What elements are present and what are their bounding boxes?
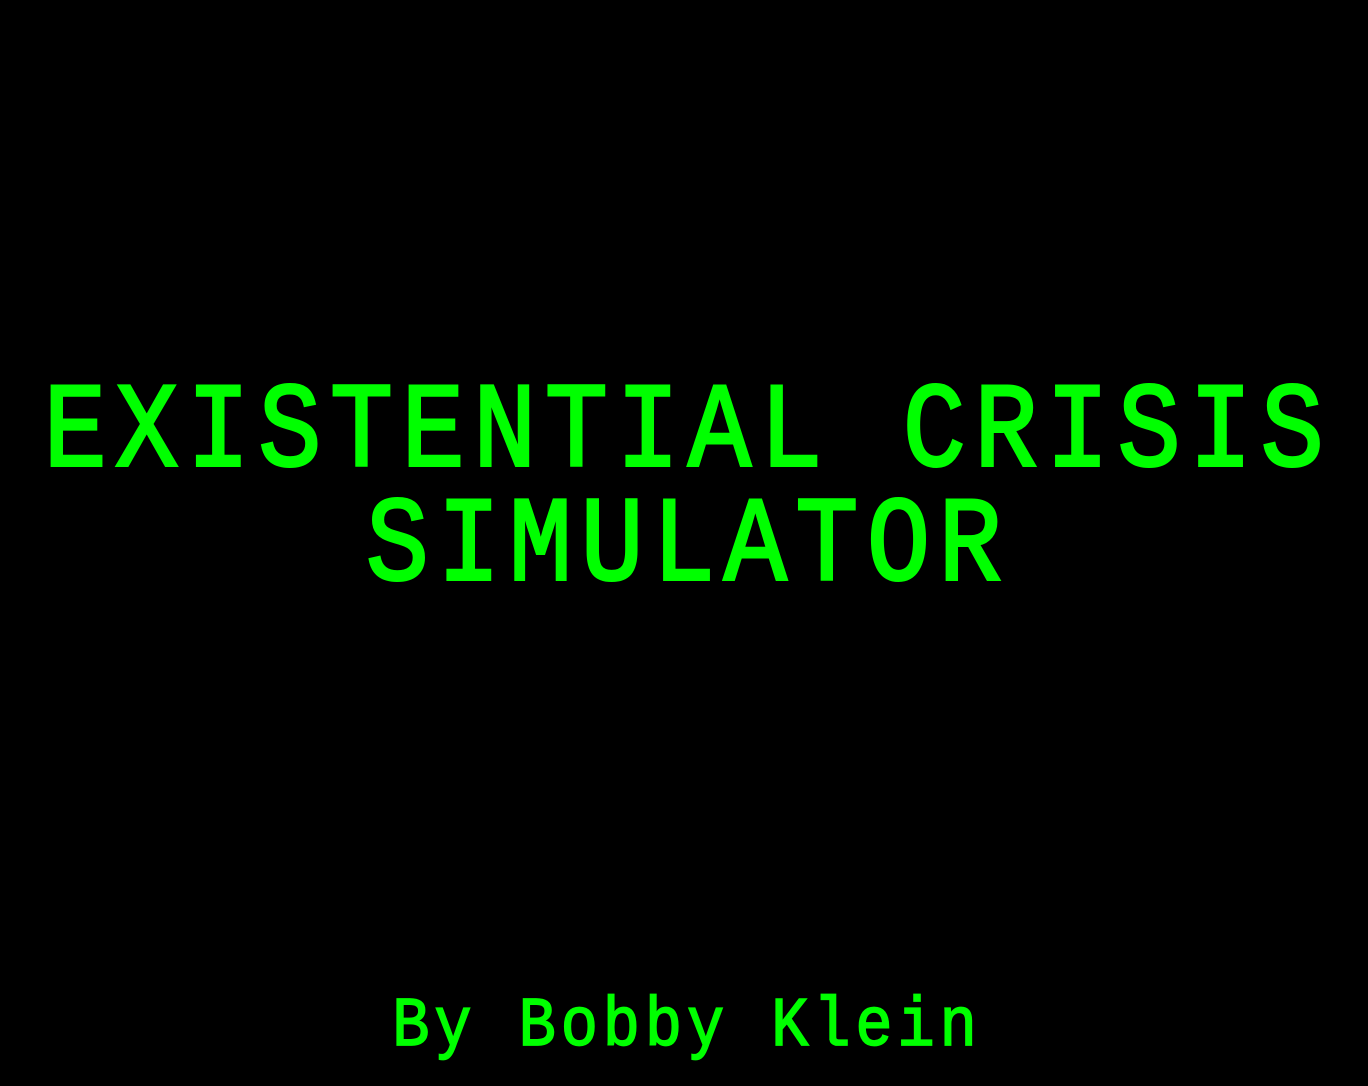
title line 1: EXISTENTIAL CRISIS — [44, 365, 1332, 502]
title — [44, 365, 1332, 616]
title line 2: SIMULATOR — [366, 479, 1010, 616]
author credit: By Bobby Klein — [392, 987, 982, 1066]
